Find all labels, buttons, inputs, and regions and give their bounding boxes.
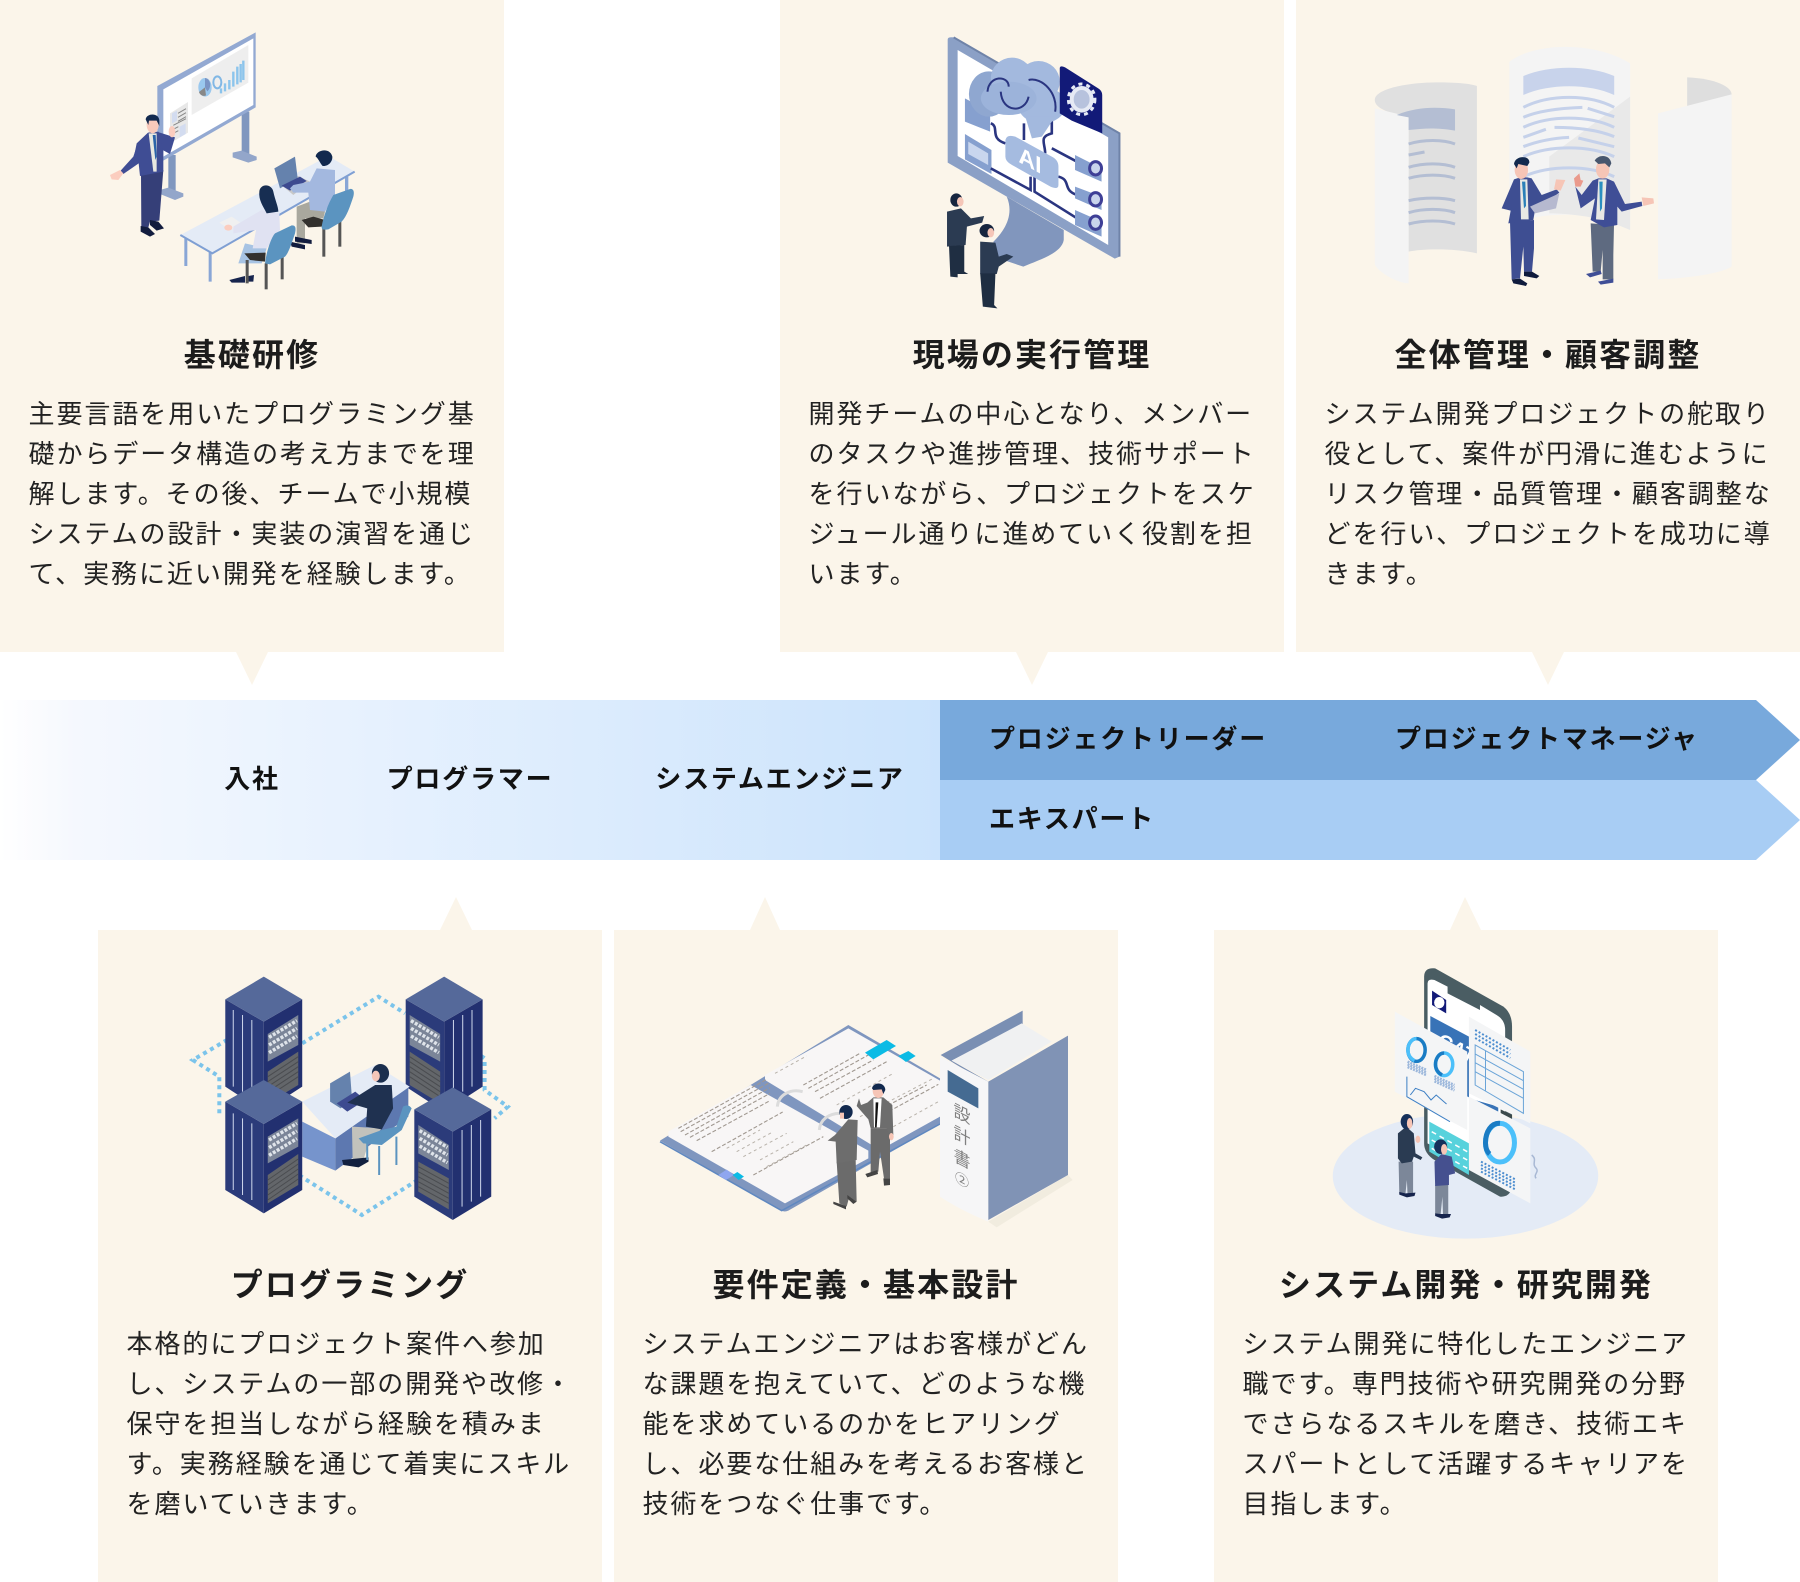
center document xyxy=(1509,47,1630,230)
spine label: 設計書: 設 xyxy=(954,1101,970,1128)
heading: 全体管理・顧客調整 xyxy=(1395,337,1701,373)
heading: 要件定義・基本設計 xyxy=(713,1267,1019,1303)
stage labels: システムエンジニア xyxy=(655,764,905,794)
icon: AI monitor with two engineers xyxy=(947,36,1120,308)
body text: 保守を担当しながら経験を積みま xyxy=(126,1409,546,1439)
stage labels: 入社 xyxy=(224,764,280,794)
body text: のタスクや進捗管理、技術サポート xyxy=(808,439,1256,469)
body text: 能を求めているのかをヒアリング xyxy=(642,1409,1062,1439)
presenter xyxy=(110,114,175,237)
table card right xyxy=(1469,1017,1530,1123)
seated man with laptop xyxy=(274,150,354,257)
career path band xyxy=(60,700,1800,860)
body text xyxy=(808,399,1256,589)
body text xyxy=(642,1329,1089,1519)
body text: スパートとして活躍するキャリアを xyxy=(1242,1449,1689,1479)
body text: システムエンジニアはお客様がどん xyxy=(642,1329,1089,1359)
body text: システム開発に特化したエンジニア xyxy=(1242,1329,1689,1359)
spine label: 設計書 xyxy=(954,1101,970,1192)
heading: システム開発・研究開発 xyxy=(1279,1267,1653,1303)
icon: binder, book and two men xyxy=(660,1010,1072,1227)
body text: を磨いていきます。 xyxy=(126,1489,375,1519)
icon: smartphone dashboards with two people xyxy=(1332,968,1598,1238)
body text: システムの設計・実装の演習を通じ xyxy=(28,519,475,549)
right scroll xyxy=(1658,77,1732,279)
panel: プログラミング xyxy=(98,898,602,1582)
body text xyxy=(1242,1329,1689,1519)
stage labels: プロジェクトマネージャ xyxy=(1395,724,1699,754)
spine label: 設計書: 書 xyxy=(954,1146,970,1173)
heading: 現場の実行管理 xyxy=(913,337,1151,373)
server bottom-right xyxy=(414,1087,491,1220)
spine label: 設計書: ② xyxy=(955,1169,969,1192)
man facing away xyxy=(828,1105,858,1209)
monitor xyxy=(948,37,1119,259)
closed book xyxy=(940,1011,1073,1227)
businessman with tablet xyxy=(1502,157,1565,286)
body text xyxy=(1324,399,1772,589)
man pointing up xyxy=(857,1083,894,1186)
icon: documents with two businessmen xyxy=(1374,47,1732,286)
chart card left xyxy=(1395,1012,1467,1130)
heading: プログラミング xyxy=(231,1267,469,1303)
body text: す。実務経験を通じて着実にスキル xyxy=(126,1449,571,1479)
panel: 現場の実行管理 xyxy=(780,0,1284,684)
open binder xyxy=(660,1025,940,1212)
monitor stand xyxy=(993,197,1064,267)
early career gradient bar xyxy=(0,700,940,860)
engineer left xyxy=(947,193,984,277)
body text: 目指します。 xyxy=(1242,1489,1408,1519)
left scroll xyxy=(1375,82,1477,283)
AI tile xyxy=(1005,136,1058,188)
brain cloud xyxy=(969,58,1066,138)
arrow: expert track xyxy=(940,780,1800,860)
body text: 本格的にプロジェクト案件へ参加 xyxy=(126,1329,546,1359)
body text: います。 xyxy=(808,559,918,589)
desk with programmer xyxy=(302,1064,412,1175)
server bottom-left xyxy=(225,1080,302,1213)
icon: training with whiteboard xyxy=(110,32,356,290)
seated woman xyxy=(224,185,296,289)
board legs xyxy=(160,112,257,200)
businessman gesturing xyxy=(1574,156,1654,285)
label: AI: AI xyxy=(1019,142,1041,180)
body text: 主要言語を用いたプログラミング基 xyxy=(28,399,476,429)
platform ellipse xyxy=(1333,1113,1598,1239)
arrow: management track xyxy=(940,700,1800,780)
whiteboard xyxy=(157,32,256,161)
panel: システム開発・研究開発 xyxy=(1214,898,1718,1582)
panel: 全体管理・顧客調整 xyxy=(1296,0,1800,684)
body text: 職です。専門技術や研究開発の分野 xyxy=(1242,1369,1687,1399)
body text: リスク管理・品質管理・顧客調整な xyxy=(1324,479,1772,509)
body text xyxy=(126,1329,573,1519)
stage labels: プログラマー xyxy=(387,764,553,794)
body text: を行いながら、プロジェクトをスケ xyxy=(808,479,1256,509)
panel: 要件定義・基本設計 xyxy=(614,898,1118,1582)
body text xyxy=(28,399,476,589)
engineer right xyxy=(980,224,1013,308)
body text: どを行い、プロジェクトを成功に導 xyxy=(1324,519,1772,549)
body text: 役として、案件が円滑に進むように xyxy=(1324,439,1770,469)
dashed network lines xyxy=(193,997,508,1215)
heading: 基礎研修 xyxy=(184,337,320,373)
body text: システム開発プロジェクトの舵取り xyxy=(1324,399,1771,429)
smartphone xyxy=(1424,968,1512,1197)
smartphone: CATC xyxy=(1433,1030,1493,1075)
body text: て、実務に近い開発を経験します。 xyxy=(28,559,472,589)
body text: し、必要な仕組みを考えるお客様と xyxy=(642,1449,1089,1479)
gear badge xyxy=(1060,66,1102,133)
stage labels: プロジェクトリーダー xyxy=(989,724,1267,754)
donut card xyxy=(1469,1097,1537,1203)
body text: な課題を抱えていて、どのような機 xyxy=(642,1369,1086,1399)
server top-left xyxy=(225,977,302,1112)
spine label: 設計書: 計 xyxy=(954,1123,970,1150)
woman right xyxy=(1434,1139,1455,1219)
body text: 解します。その後、チームで小規模 xyxy=(28,479,472,509)
body text: ジュール通りに進めていく役割を担 xyxy=(808,519,1254,549)
stage labels xyxy=(224,724,1699,834)
server top-right xyxy=(406,977,483,1112)
stage labels: エキスパート xyxy=(989,804,1155,834)
body text: 開発チームの中心となり、メンバー xyxy=(808,399,1253,429)
panel: 基礎研修 xyxy=(0,0,504,684)
body text: 技術をつなぐ仕事です。 xyxy=(642,1489,947,1519)
woman left xyxy=(1398,1114,1422,1197)
body text: きます。 xyxy=(1324,559,1434,589)
body text: 礎からデータ構造の考え方までを理 xyxy=(28,439,476,469)
body text: し、システムの一部の開発や改修・ xyxy=(126,1369,573,1399)
icon: servers with programmer xyxy=(189,976,511,1220)
table xyxy=(180,156,355,282)
body text: でさらなるスキルを磨き、技術エキ xyxy=(1242,1409,1688,1439)
